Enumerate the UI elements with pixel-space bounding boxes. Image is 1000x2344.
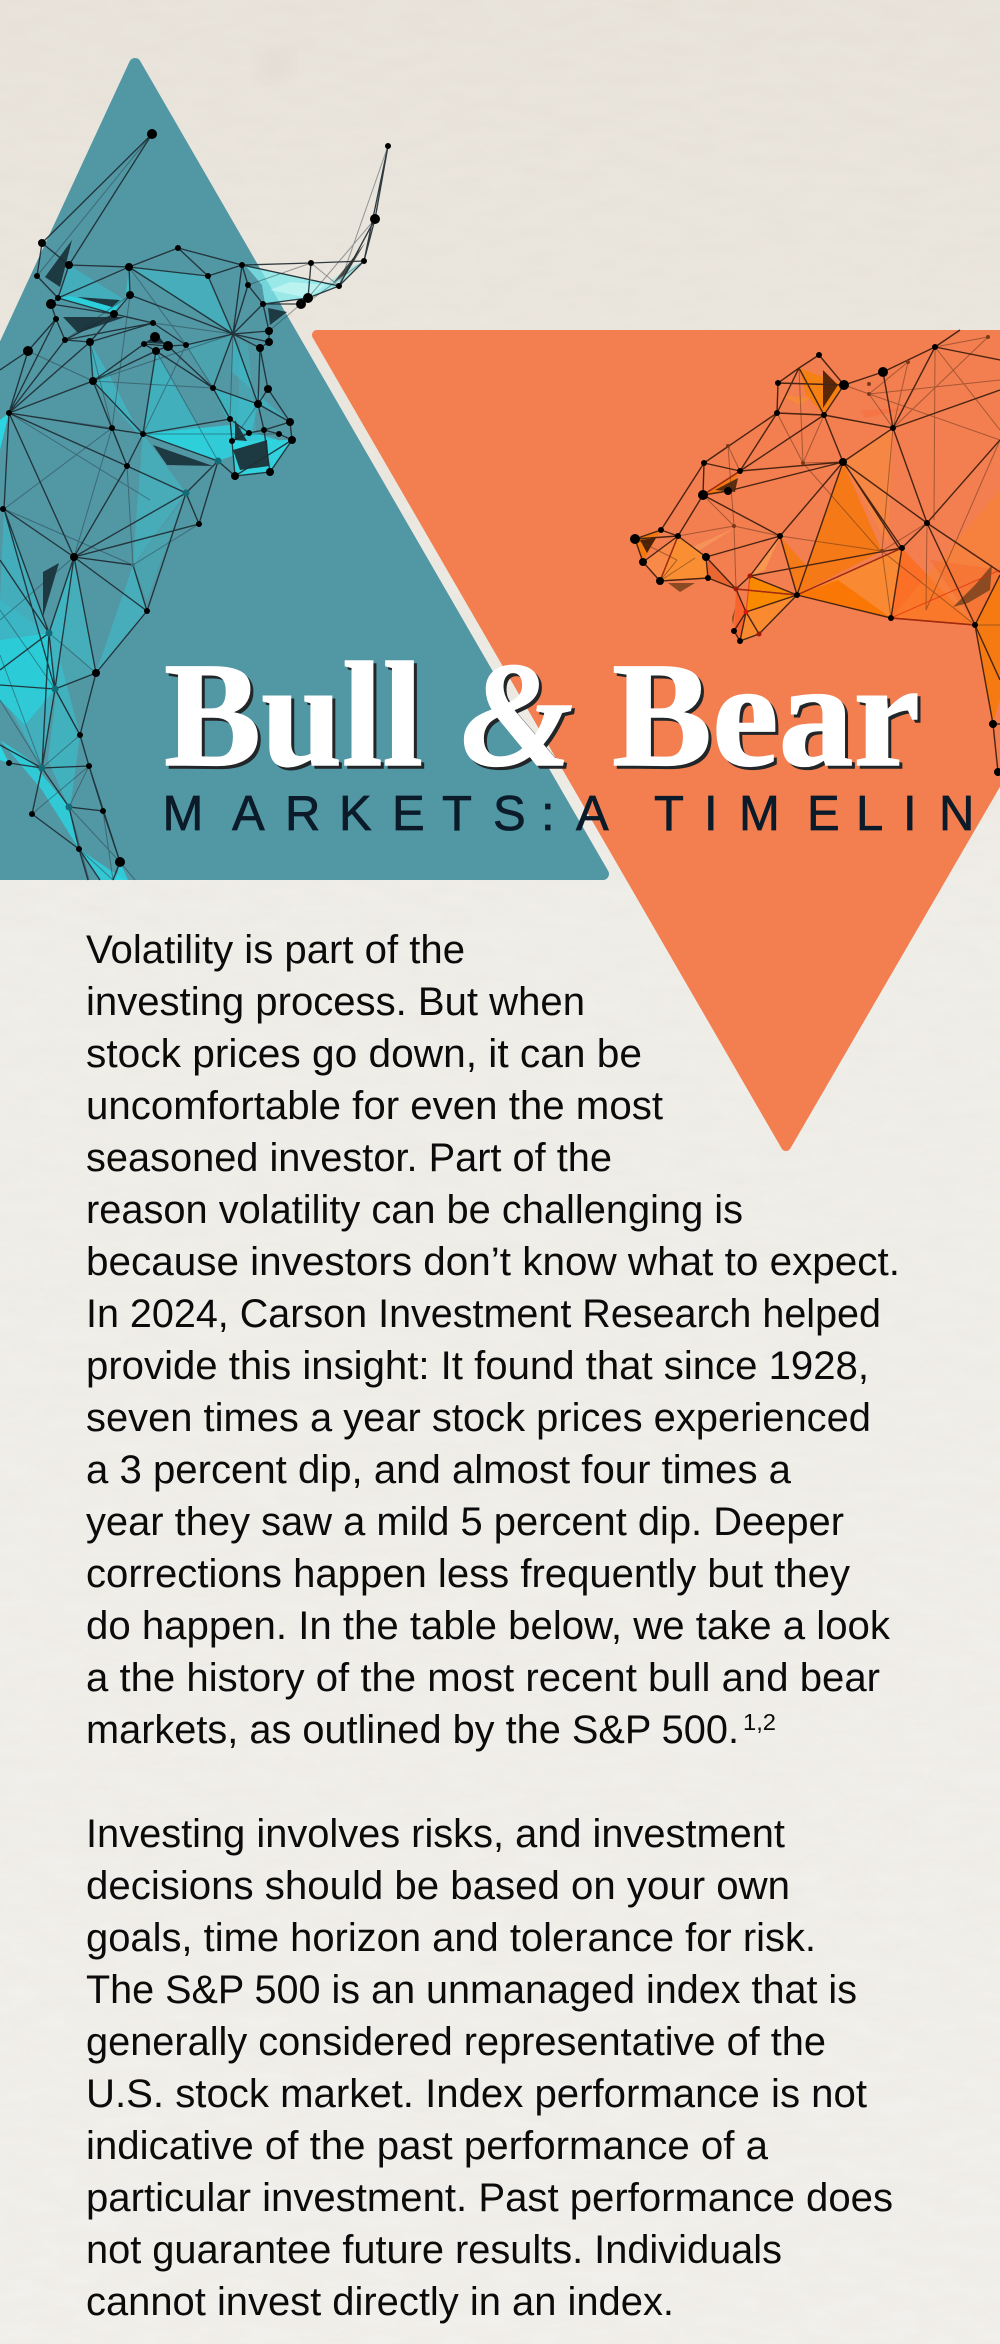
illustration: low-poly bear xyxy=(635,330,1000,772)
text block: intro paragraph: a 3 percent dip, and almost four times a xyxy=(86,1448,791,1492)
bull dark shards xyxy=(43,240,365,617)
panel: teal bull triangle xyxy=(0,64,603,874)
text block: risk disclosure paragraph: not guarantee future results. Individuals xyxy=(86,2228,782,2272)
text block: intro paragraph: reason volatility can be challenging is xyxy=(86,1188,743,1232)
bull main mesh lines xyxy=(0,134,388,880)
text block: intro paragraph: year they saw a mild 5 percent dip. Deeper xyxy=(86,1500,844,1544)
title white face: Bull xyxy=(164,632,423,798)
text block: risk disclosure paragraph: particular investment. Past performance does xyxy=(86,2176,893,2220)
title white face: & xyxy=(461,632,573,798)
bull translucent facets xyxy=(0,261,364,880)
text block: intro paragraph: do happen. In the table below, we take a look xyxy=(86,1604,890,1648)
illustration: low-poly bull xyxy=(0,134,388,880)
text block: intro paragraph: uncomfortable for even the most xyxy=(86,1084,663,1128)
text block: intro paragraph: seven times a year stock prices experienced xyxy=(86,1396,871,1440)
text block: intro paragraph xyxy=(86,928,900,1752)
text block: intro paragraph: corrections happen less frequently but they xyxy=(86,1552,850,1596)
text block: risk disclosure paragraph xyxy=(86,1812,893,2324)
text block: risk disclosure paragraph: U.S. stock market. Index performance is not xyxy=(86,2072,867,2116)
text block: intro paragraph: In 2024, Carson Investment Research helped xyxy=(86,1292,881,1336)
bear main mesh lines xyxy=(635,330,1000,772)
text block: intro paragraph: investing process. But when xyxy=(86,980,585,1024)
text block: risk disclosure paragraph: indicative of the past performance of a xyxy=(86,2124,768,2168)
bear red accent lines xyxy=(660,471,1000,625)
title drop shadow: Bull xyxy=(167,635,426,801)
title drop shadow: Bear xyxy=(615,635,923,801)
bear thin mesh lines xyxy=(635,337,1000,625)
text block: risk disclosure paragraph: decisions should be based on your own xyxy=(86,1864,790,1908)
text block: intro paragraph: provide this insight: It found that since 1928, xyxy=(86,1344,869,1388)
text block: intro paragraph: a the history of the most recent bull and bear xyxy=(86,1656,880,1700)
text block: intro paragraph: 1,2 xyxy=(743,1709,776,1735)
text block: risk disclosure paragraph: goals, time horizon and tolerance for risk. xyxy=(86,1916,816,1960)
title drop shadow: & xyxy=(464,635,576,801)
title white face xyxy=(164,632,920,798)
title white face: Bear xyxy=(612,632,920,798)
text block: intro paragraph: stock prices go down, it can be xyxy=(86,1032,642,1076)
panel: orange bear triangle xyxy=(317,335,1000,1146)
bear dark shards xyxy=(640,370,992,625)
text block: risk disclosure paragraph: Investing involves risks, and investment xyxy=(86,1812,785,1856)
text block: intro paragraph: seasoned investor. Part of the xyxy=(86,1136,612,1180)
title: Bull & Bear xyxy=(164,632,923,801)
text block: risk disclosure paragraph: cannot invest directly in an index. xyxy=(86,2280,674,2324)
text block: intro paragraph: markets, as outlined by the S&P 500. xyxy=(86,1708,739,1752)
title drop shadow xyxy=(167,635,923,801)
text block: risk disclosure paragraph: The S&P 500 is an unmanaged index that is xyxy=(86,1968,857,2012)
bear translucent facets xyxy=(635,368,1000,723)
bear nodes xyxy=(635,337,998,772)
bull thin mesh lines xyxy=(0,134,388,880)
bull nodes xyxy=(3,134,388,862)
text block: intro paragraph: because investors don’t know what to expect. xyxy=(86,1240,900,1284)
text block: risk disclosure paragraph: generally considered representative of the xyxy=(86,2020,826,2064)
text block: intro paragraph: Volatility is part of the xyxy=(86,928,465,972)
